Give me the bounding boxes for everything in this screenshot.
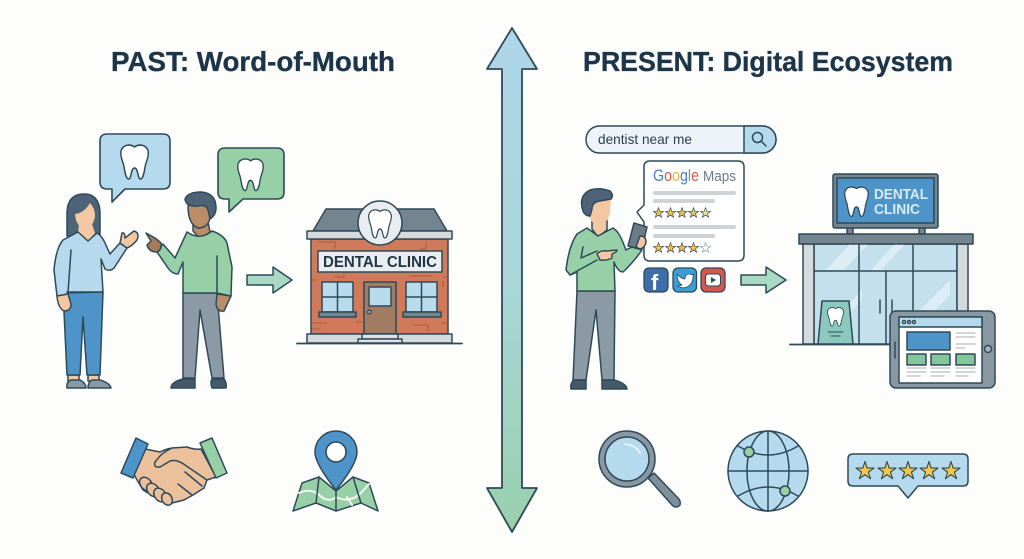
icon: handshake	[121, 438, 227, 507]
tablet with website	[890, 311, 995, 388]
center double arrow divider	[487, 28, 537, 532]
Google Maps logo text	[653, 167, 736, 185]
icon: map with pin	[293, 431, 378, 511]
clinic sign: DENTAL CLINIC	[323, 254, 437, 271]
glass front	[814, 244, 957, 344]
Google Maps logo text: Maps	[703, 168, 736, 185]
building: traditional dental clinic	[297, 201, 462, 344]
icon: Twitter bird	[673, 268, 696, 292]
digital clinic sign	[833, 174, 938, 228]
door	[364, 282, 396, 334]
right window	[403, 282, 441, 317]
title: past: PAST: Word-of-Mouth	[111, 46, 395, 77]
A-frame sidewalk sign	[818, 301, 853, 344]
icon: Facebook: f	[651, 270, 659, 295]
icon: globe with nodes	[728, 431, 808, 511]
icon: magnifying glass	[599, 431, 680, 507]
star rating: second review	[653, 242, 711, 252]
person: man pointing	[146, 192, 232, 388]
search icon	[752, 132, 766, 146]
icon: five-star review bubble	[848, 454, 968, 498]
person: man with phone	[566, 189, 647, 389]
digital clinic sign: DENTAL	[874, 187, 928, 203]
digital clinic sign: CLINIC	[874, 202, 920, 218]
roof	[313, 209, 447, 231]
search bar	[586, 126, 776, 153]
title: present: PRESENT: Digital Ecosystem	[583, 46, 953, 77]
speech bubble: blue with tooth	[100, 134, 170, 202]
arrow: digital to clinic	[741, 267, 786, 293]
search bar: dentist near me	[598, 131, 692, 147]
building: modern dental clinic	[790, 174, 973, 344]
Google Maps review card	[637, 161, 744, 261]
star rating: first review	[653, 208, 711, 217]
Google Maps logo text: Google	[653, 167, 699, 185]
left window	[319, 282, 356, 317]
clinic tooth badge	[358, 201, 402, 245]
icon: Facebook	[644, 268, 668, 295]
arrow: people to clinic	[247, 267, 292, 293]
person: woman talking	[54, 194, 138, 388]
icon: YouTube	[701, 268, 725, 292]
speech bubble: green with tooth	[218, 148, 284, 212]
